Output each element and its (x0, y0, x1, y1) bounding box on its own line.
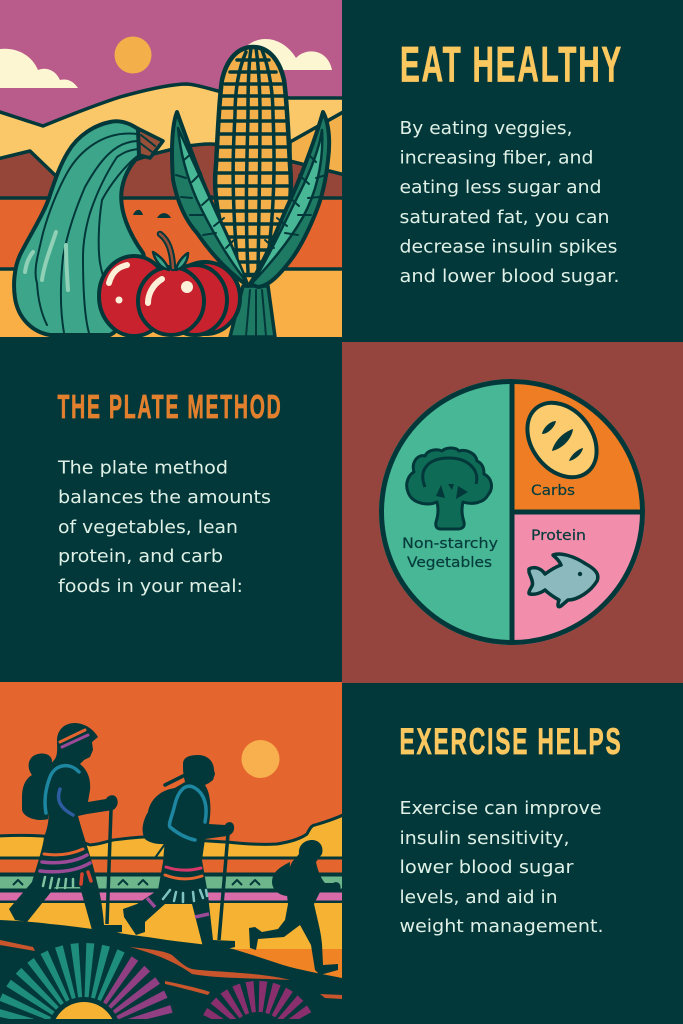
silhouette (249, 840, 341, 975)
text block: plate method body: of vegetables, lean (58, 518, 238, 538)
text block: exercise body: insulin sensitivity, (400, 829, 570, 849)
text block: plate method body: balances the amounts (58, 488, 271, 508)
vegetables section (379, 379, 512, 645)
icon: left corn leaf (172, 112, 248, 286)
text block: eat healthy body: eating less sugar and (400, 178, 602, 198)
text block: exercise body: Exercise can improve (400, 799, 602, 819)
text block: eat healthy body: decrease insulin spikes (400, 238, 618, 258)
green patterned band (0, 875, 345, 890)
text block: plate method body: foods in your meal: (58, 577, 243, 597)
text block: eat healthy body: and lower blood sugar. (400, 267, 620, 287)
hiker 3 (249, 840, 341, 975)
yellow foreground (0, 269, 345, 338)
pink band (0, 891, 345, 902)
label: non-starchy vegetables: Vegetables (407, 555, 492, 571)
carbs section (512, 379, 645, 512)
text block: eat healthy body (400, 119, 620, 287)
text block: exercise body: weight management. (400, 917, 604, 937)
panel: plate diagram (342, 342, 683, 683)
icon: corn cob (215, 47, 291, 275)
text block: exercise body: levels, and aid in (400, 888, 558, 908)
protein section (512, 512, 645, 645)
label: carbs: Carbs (531, 483, 575, 499)
label: non-starchy vegetables (402, 536, 498, 571)
panel: vegetable illustration (0, 0, 342, 337)
text block: eat healthy body: saturated fat, you can (400, 208, 610, 228)
panel: hikers illustration (0, 682, 342, 1019)
backpack (143, 788, 175, 844)
icon: right cloud (248, 39, 332, 70)
backpack (22, 754, 52, 820)
silhouette (123, 755, 235, 952)
hiker 1 (9, 723, 122, 935)
sunburst left (0, 943, 175, 1024)
text block: plate method body (57, 458, 271, 597)
icon: right corn leaf (250, 112, 329, 287)
hiker 2 (123, 755, 235, 952)
backpack (272, 862, 290, 896)
icon: squash (14, 121, 163, 335)
far hills (0, 84, 345, 342)
straps (45, 766, 79, 813)
dark ground (0, 920, 342, 1024)
text block: exercise body: lower blood sugar (400, 858, 574, 878)
text block: eat healthy body: increasing fiber, and (400, 148, 594, 168)
icon: left cloud (0, 49, 78, 88)
text block: eat healthy body: By eating veggies, (400, 119, 572, 139)
silhouette (9, 723, 122, 935)
plate (379, 379, 645, 645)
yellow field (0, 903, 345, 973)
icon: broccoli (407, 448, 491, 529)
icon: sun (114, 36, 152, 74)
brown hills (0, 144, 345, 200)
text block: plate method body: The plate method (57, 458, 228, 478)
icon: sun (242, 740, 280, 778)
orange field (0, 198, 345, 270)
icon: tomatoes (99, 234, 240, 336)
heading: The Plate Method: THE PLATE METHOD (58, 388, 282, 425)
label: non-starchy vegetables: Non-starchy (402, 536, 498, 552)
sunburst right (0, 981, 342, 1024)
label: protein: Protein (531, 528, 586, 544)
skirt stripes (166, 867, 201, 870)
orange band (0, 858, 345, 874)
icon: corn husk base (230, 286, 275, 337)
hat band (60, 730, 85, 742)
text block: exercise body (400, 799, 604, 937)
distant yellow hills (0, 814, 345, 858)
text block: plate method body: protein, and carb (58, 547, 223, 567)
icon: fish (529, 554, 598, 607)
straps (169, 786, 206, 840)
skirt stripes (44, 849, 83, 855)
icon: bread (513, 389, 611, 491)
